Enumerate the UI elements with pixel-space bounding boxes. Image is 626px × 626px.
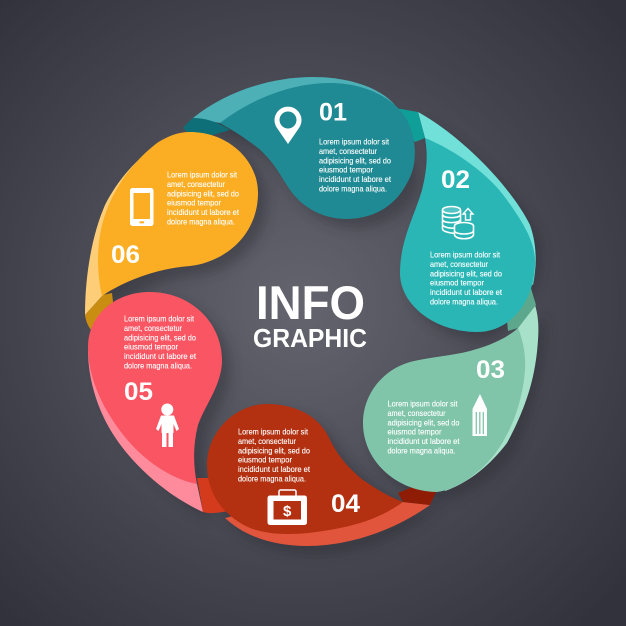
icon: phone: [130, 188, 154, 226]
text block 04: Lorem ipsum dolor sit: [238, 428, 309, 436]
title: GRAPHIC: [253, 323, 367, 353]
text block 03: [388, 400, 460, 456]
panel 01 drop: [220, 83, 415, 219]
text block 06: Lorem ipsum dolor sit: [167, 170, 238, 180]
text block 05: eiusmod tempor: [124, 343, 178, 352]
icon: pencil: [472, 394, 487, 436]
text block 06: amet, consectetur: [167, 180, 225, 189]
text block 06: [167, 170, 240, 226]
text block 05: [124, 314, 197, 370]
text block 01: eiusmod tempor: [319, 166, 373, 175]
text block 04: [238, 428, 311, 484]
text block 03: amet, consectetur: [388, 409, 446, 418]
text block 01: dolore magna aliqua.: [319, 184, 387, 194]
number 02: 02: [441, 166, 470, 194]
text block 04: dolore magna aliqua.: [238, 474, 306, 484]
panel 04 ribbon: [225, 486, 437, 546]
text block 03: dolore magna aliqua.: [388, 446, 456, 456]
text block 01: Lorem ipsum dolor sit: [319, 138, 390, 146]
text block 04: amet, consectetur: [238, 437, 296, 446]
text block 06: eiusmod tempor: [167, 199, 221, 208]
text block 05: adipisicing elit, sed do: [124, 333, 196, 342]
icon: briefcase: $: [283, 503, 292, 520]
text block 01: amet, consectetur: [319, 147, 377, 156]
title: INFO: [256, 276, 365, 329]
icon: briefcase: [268, 490, 307, 525]
text block 01: [319, 138, 392, 194]
text block 06: dolore magna aliqua.: [167, 218, 235, 226]
number 03: 03: [476, 356, 505, 384]
number 04: 04: [331, 490, 360, 518]
panel 05 ribbon: [88, 350, 228, 513]
text block 05: amet, consectetur: [124, 324, 182, 333]
text block 05: incididunt ut labore et: [124, 352, 197, 361]
text block 02: adipisicing elit, sed do: [430, 269, 502, 278]
panel 03 ribbon: [445, 285, 538, 491]
title: [253, 276, 367, 353]
text block 01: incididunt ut labore et: [319, 175, 392, 184]
text block 04: eiusmod tempor: [238, 456, 292, 465]
text block 03: incididunt ut labore et: [388, 437, 460, 446]
icon: person: [156, 404, 179, 447]
number 01: 01: [319, 98, 347, 126]
text block 03: adipisicing elit, sed do: [388, 418, 460, 427]
panel 04 drop: [207, 404, 403, 534]
panel 06 drop: [98, 132, 258, 296]
panel 01 ribbon: [183, 77, 395, 140]
text block 02: amet, consectetur: [430, 260, 488, 269]
text block 05: dolore magna aliqua.: [124, 362, 192, 370]
text block 04: incididunt ut labore et: [238, 465, 311, 474]
panel 02 drop: [400, 138, 535, 332]
panel 03 drop: [363, 328, 525, 492]
text block 06: incididunt ut labore et: [167, 208, 240, 217]
icon: coins: [442, 206, 474, 239]
panel 02 ribbon: [395, 108, 536, 285]
number 06: 06: [111, 241, 140, 269]
text block 02: Lorem ipsum dolor sit: [430, 250, 501, 260]
text block 02: eiusmod tempor: [430, 279, 484, 288]
number 05: 05: [124, 378, 153, 406]
text block 02: [430, 250, 503, 306]
panel 06 ribbon: [85, 137, 170, 335]
text block 03: Lorem ipsum dolor sit: [388, 400, 458, 408]
text block 05: Lorem ipsum dolor sit: [124, 314, 195, 324]
icon: map pin: [274, 107, 301, 144]
drop shadows: [94, 86, 545, 555]
text block 03: eiusmod tempor: [388, 428, 442, 437]
text block 02: incididunt ut labore et: [430, 288, 503, 297]
text block 01: adipisicing elit, sed do: [319, 156, 391, 165]
text block 04: adipisicing elit, sed do: [238, 446, 310, 455]
panel 05 drop: [88, 292, 222, 484]
text block 02: dolore magna aliqua.: [430, 298, 498, 306]
text block 06: adipisicing elit, sed do: [167, 189, 239, 198]
